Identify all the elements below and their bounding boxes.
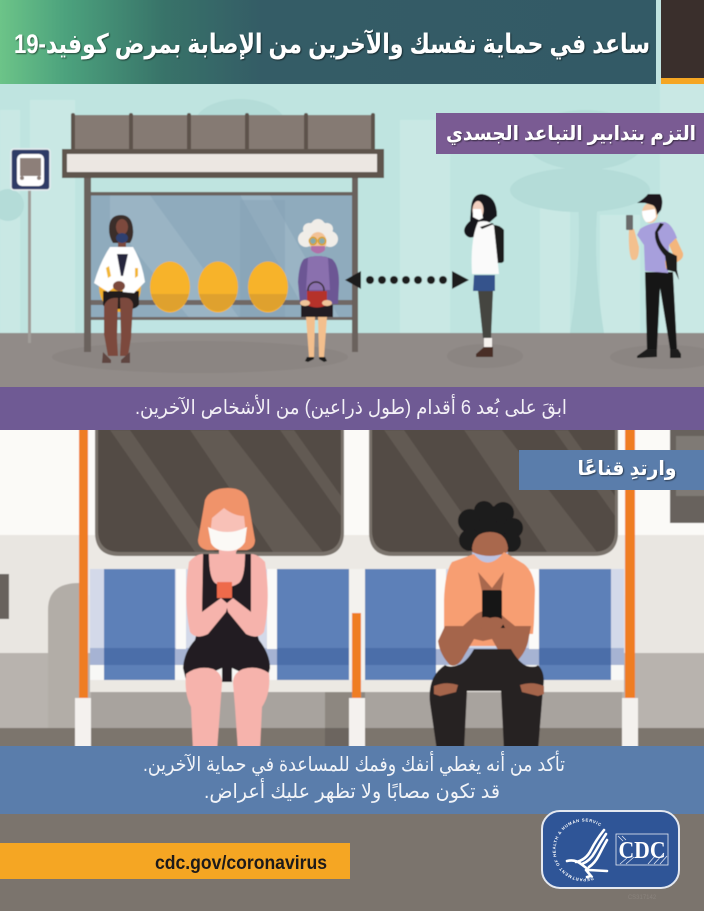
orange poles	[75, 425, 638, 752]
train seats	[90, 569, 624, 752]
reference code: CS317142	[628, 895, 657, 901]
website bar: cdc.gov/coronavirus	[155, 853, 327, 874]
panel: mask caption: تأكد من أنه يغطي أنفك وفمك للمساعدة في حماية الآخرين.	[143, 750, 565, 777]
person: seated woman with mask	[183, 488, 270, 751]
panel: bus stop scene	[0, 78, 704, 393]
person: seated elderly woman	[298, 219, 339, 362]
icon: bus stop sign	[11, 149, 50, 343]
bus shelter	[62, 113, 384, 352]
panel: footer	[0, 814, 704, 911]
person: seated woman in white jacket	[94, 215, 145, 363]
header banner	[0, 0, 704, 84]
HHS seal text: DEPARTMENT OF HEALTH & HUMAN SERVICES USA	[552, 818, 602, 882]
CDC mark: CDC	[618, 838, 666, 864]
panel: mask caption: قد تكون مصابًا ولا تظهر عليك أعراض.	[204, 778, 500, 803]
panel: train scene	[0, 425, 704, 752]
website bar	[0, 843, 350, 879]
panel: distancing caption: ابقَ على بُعد 6 أقدام (طول ذراعين) من الأشخاص الآخرين.	[135, 394, 567, 419]
person: standing woman with backpack	[464, 194, 504, 357]
heading: wear a mask	[519, 450, 704, 490]
panel: mask caption	[0, 746, 704, 814]
person: standing man with phone	[626, 194, 683, 358]
train door arch	[48, 583, 79, 728]
arrow: six foot distance	[345, 271, 469, 289]
yellow bus seats	[99, 262, 288, 312]
person: seated man with mask	[430, 501, 544, 751]
panel: distancing caption	[0, 387, 704, 430]
train windows	[95, 425, 618, 556]
ground	[0, 333, 704, 393]
heading: physical distancing	[436, 113, 704, 154]
HHS eagle	[567, 830, 607, 877]
black top and shorts	[183, 554, 270, 684]
heading: wear a mask: وارتدِ قناعًا	[578, 458, 676, 480]
